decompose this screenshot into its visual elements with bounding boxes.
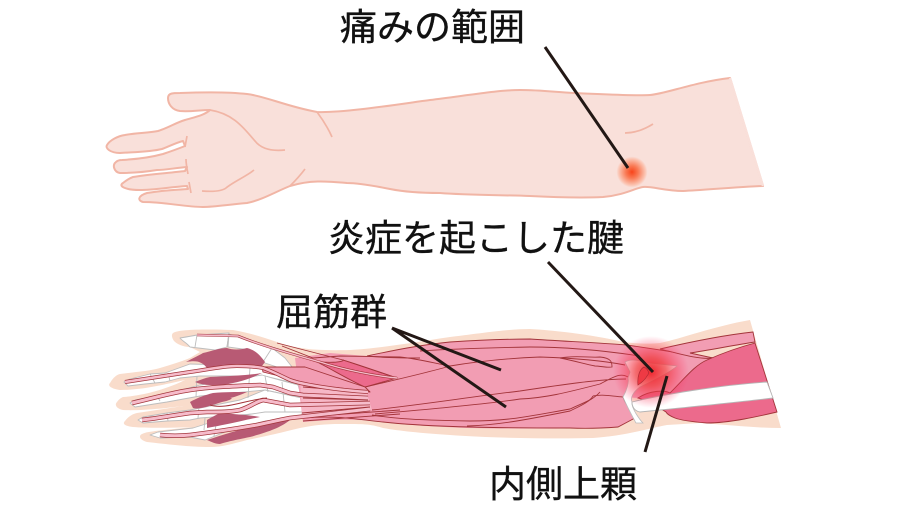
ring finger bones (138, 390, 302, 423)
middle finger bones (130, 375, 302, 407)
ring finger tendon (142, 400, 370, 420)
little finger muscle (207, 420, 290, 444)
leader line: inflamed tendon (548, 262, 653, 372)
inflamed tendon shape (638, 367, 648, 385)
leader lines: flexor muscle group (392, 328, 506, 407)
joint lines (150, 333, 285, 436)
ulna bone (632, 382, 773, 412)
second interosseous muscle (195, 373, 262, 385)
label: flexor muscle group: 屈筋群 (276, 292, 387, 333)
upper arm muscle band (660, 332, 755, 358)
upper illustration: forearm exterior (107, 78, 763, 207)
little finger tendon (160, 409, 370, 436)
hand bones (124, 333, 302, 440)
wrist tendon belly (262, 367, 370, 392)
pain spot (616, 156, 648, 188)
thumb tendon (197, 335, 397, 378)
label: pain area: 痛みの範囲 (340, 7, 525, 48)
label: inflamed tendon: 炎症を起こした腱 (328, 218, 624, 259)
skin creases (185, 110, 653, 193)
arm and hand silhouette (107, 78, 763, 207)
ring finger branch (210, 398, 267, 406)
medial epicondyle bone (623, 360, 677, 423)
main forearm muscles (295, 339, 713, 429)
muscle outlines (277, 339, 713, 428)
little finger bones (150, 412, 302, 440)
skin silhouette (109, 320, 781, 447)
deep pink muscle beside wrist (313, 360, 397, 387)
thumb phalanx (180, 333, 229, 350)
third interosseous muscle (190, 392, 247, 408)
middle finger tendon (132, 385, 368, 403)
pale tendon sheet at wrist (300, 378, 372, 416)
deep hand muscles (186, 348, 290, 444)
tendons in fingers (125, 335, 397, 436)
cut edge of the arm (730, 78, 763, 186)
lower illustration: forearm anatomy (109, 320, 781, 447)
label: medial epicondyle: 内側上顆 (489, 464, 637, 505)
deep pink upper arm muscle (638, 343, 777, 423)
index finger tendon (125, 366, 368, 392)
leader line: pain area (545, 47, 628, 168)
first interosseous muscle (186, 348, 265, 368)
thumb metacarpal (228, 334, 296, 372)
inflammation glow (613, 336, 689, 408)
leader line: medial epicondyle (645, 376, 667, 452)
index finger bones (124, 364, 302, 386)
fourth interosseous muscle (207, 413, 260, 428)
